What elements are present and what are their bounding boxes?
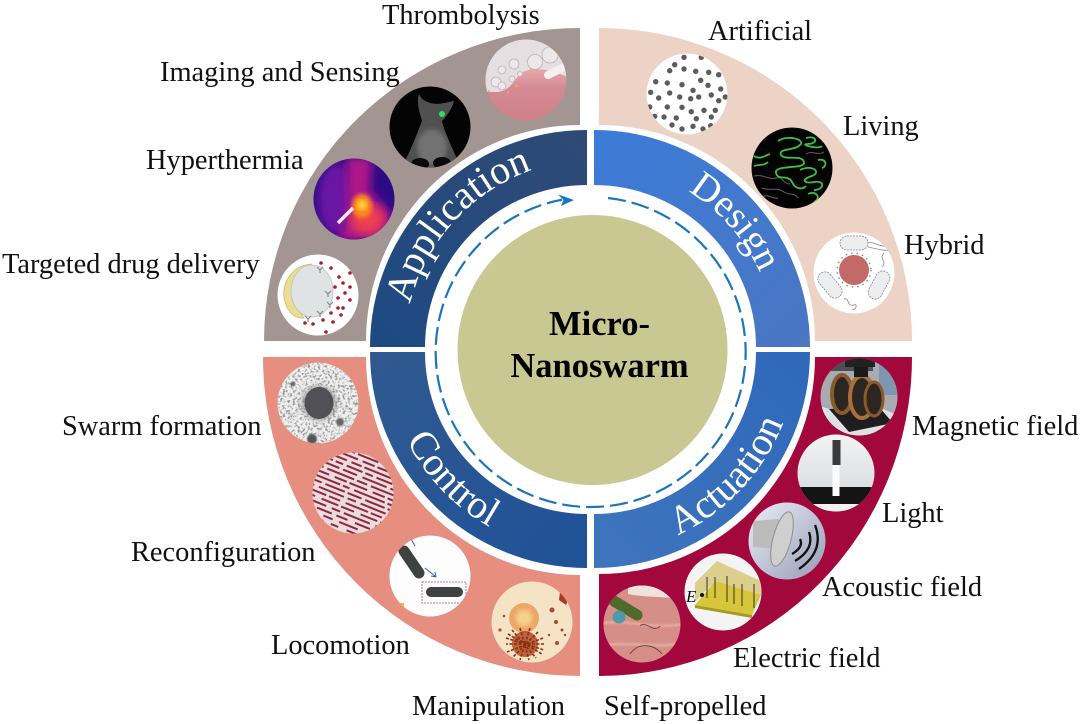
- panel: actuation outer sector: [599, 357, 912, 676]
- icon: self-propelled bacteria on tissue: [604, 586, 680, 662]
- ring segment: design: [594, 130, 810, 347]
- ring label: application: Application: [388, 154, 532, 304]
- label: acoustic field: Acoustic field: [822, 572, 982, 603]
- label: thrombolysis: Thrombolysis: [382, 0, 540, 31]
- label: hyperthermia: Hyperthermia: [146, 145, 304, 176]
- label: swarm formation: Swarm formation: [62, 411, 261, 442]
- dashed cycle arrow: [436, 194, 746, 507]
- panel: control outer sector: [263, 357, 580, 676]
- center circle: [458, 215, 728, 485]
- icon: locomotion swarm: [388, 534, 472, 618]
- label: light: Light: [882, 498, 944, 529]
- icon: electric field plates: E: [685, 587, 697, 606]
- ring label: design: Design: [689, 170, 774, 272]
- label: hybrid: Hybrid: [904, 230, 984, 261]
- label: imaging and sensing: Imaging and Sensing: [160, 57, 400, 88]
- center title: Nanoswarm: [510, 347, 689, 385]
- label: manipulation: Manipulation: [412, 691, 565, 722]
- ring segment: actuation: [594, 352, 810, 568]
- icon: targeted drug delivery: [276, 253, 360, 337]
- ring segment: application: [370, 130, 587, 347]
- label: self-propelled: Self-propelled: [604, 691, 766, 722]
- ring segment: control: [370, 352, 587, 568]
- label: locomotion: Locomotion: [271, 630, 410, 661]
- label: reconfiguration: Reconfiguration: [131, 537, 315, 568]
- icon: artificial particles: [645, 52, 729, 136]
- label: magnetic field: Magnetic field: [912, 411, 1078, 442]
- icon: swarm formation: [276, 361, 360, 445]
- icon: living spirulina: [750, 126, 834, 210]
- icon: reconfiguration chains: [312, 452, 394, 534]
- icon: thrombolysis micrograph: [484, 38, 568, 122]
- center title: Micro-: [549, 305, 650, 343]
- icon: manipulation: [490, 580, 574, 664]
- icon: hyperthermia thermal map: [312, 157, 396, 241]
- label: living: Living: [843, 111, 919, 142]
- ring label: control: Control: [410, 432, 500, 527]
- icon: acoustic transducer: [748, 502, 826, 580]
- icon: electric field plates: [684, 554, 762, 630]
- label: targeted drug delivery: Targeted drug delivery: [2, 249, 260, 280]
- icon: magnetic field coil: [820, 358, 898, 436]
- icon: light source: [798, 434, 874, 512]
- label: electric field: Electric field: [733, 643, 880, 674]
- panel: application outer sector: [264, 28, 580, 341]
- panel: design outer sector: [599, 28, 912, 341]
- icon: hybrid biohybrid: [812, 231, 896, 315]
- ring label: actuation: Actuation: [676, 419, 784, 536]
- icon: imaging mouse: [388, 85, 472, 170]
- label: artificial: Artificial: [708, 16, 812, 47]
